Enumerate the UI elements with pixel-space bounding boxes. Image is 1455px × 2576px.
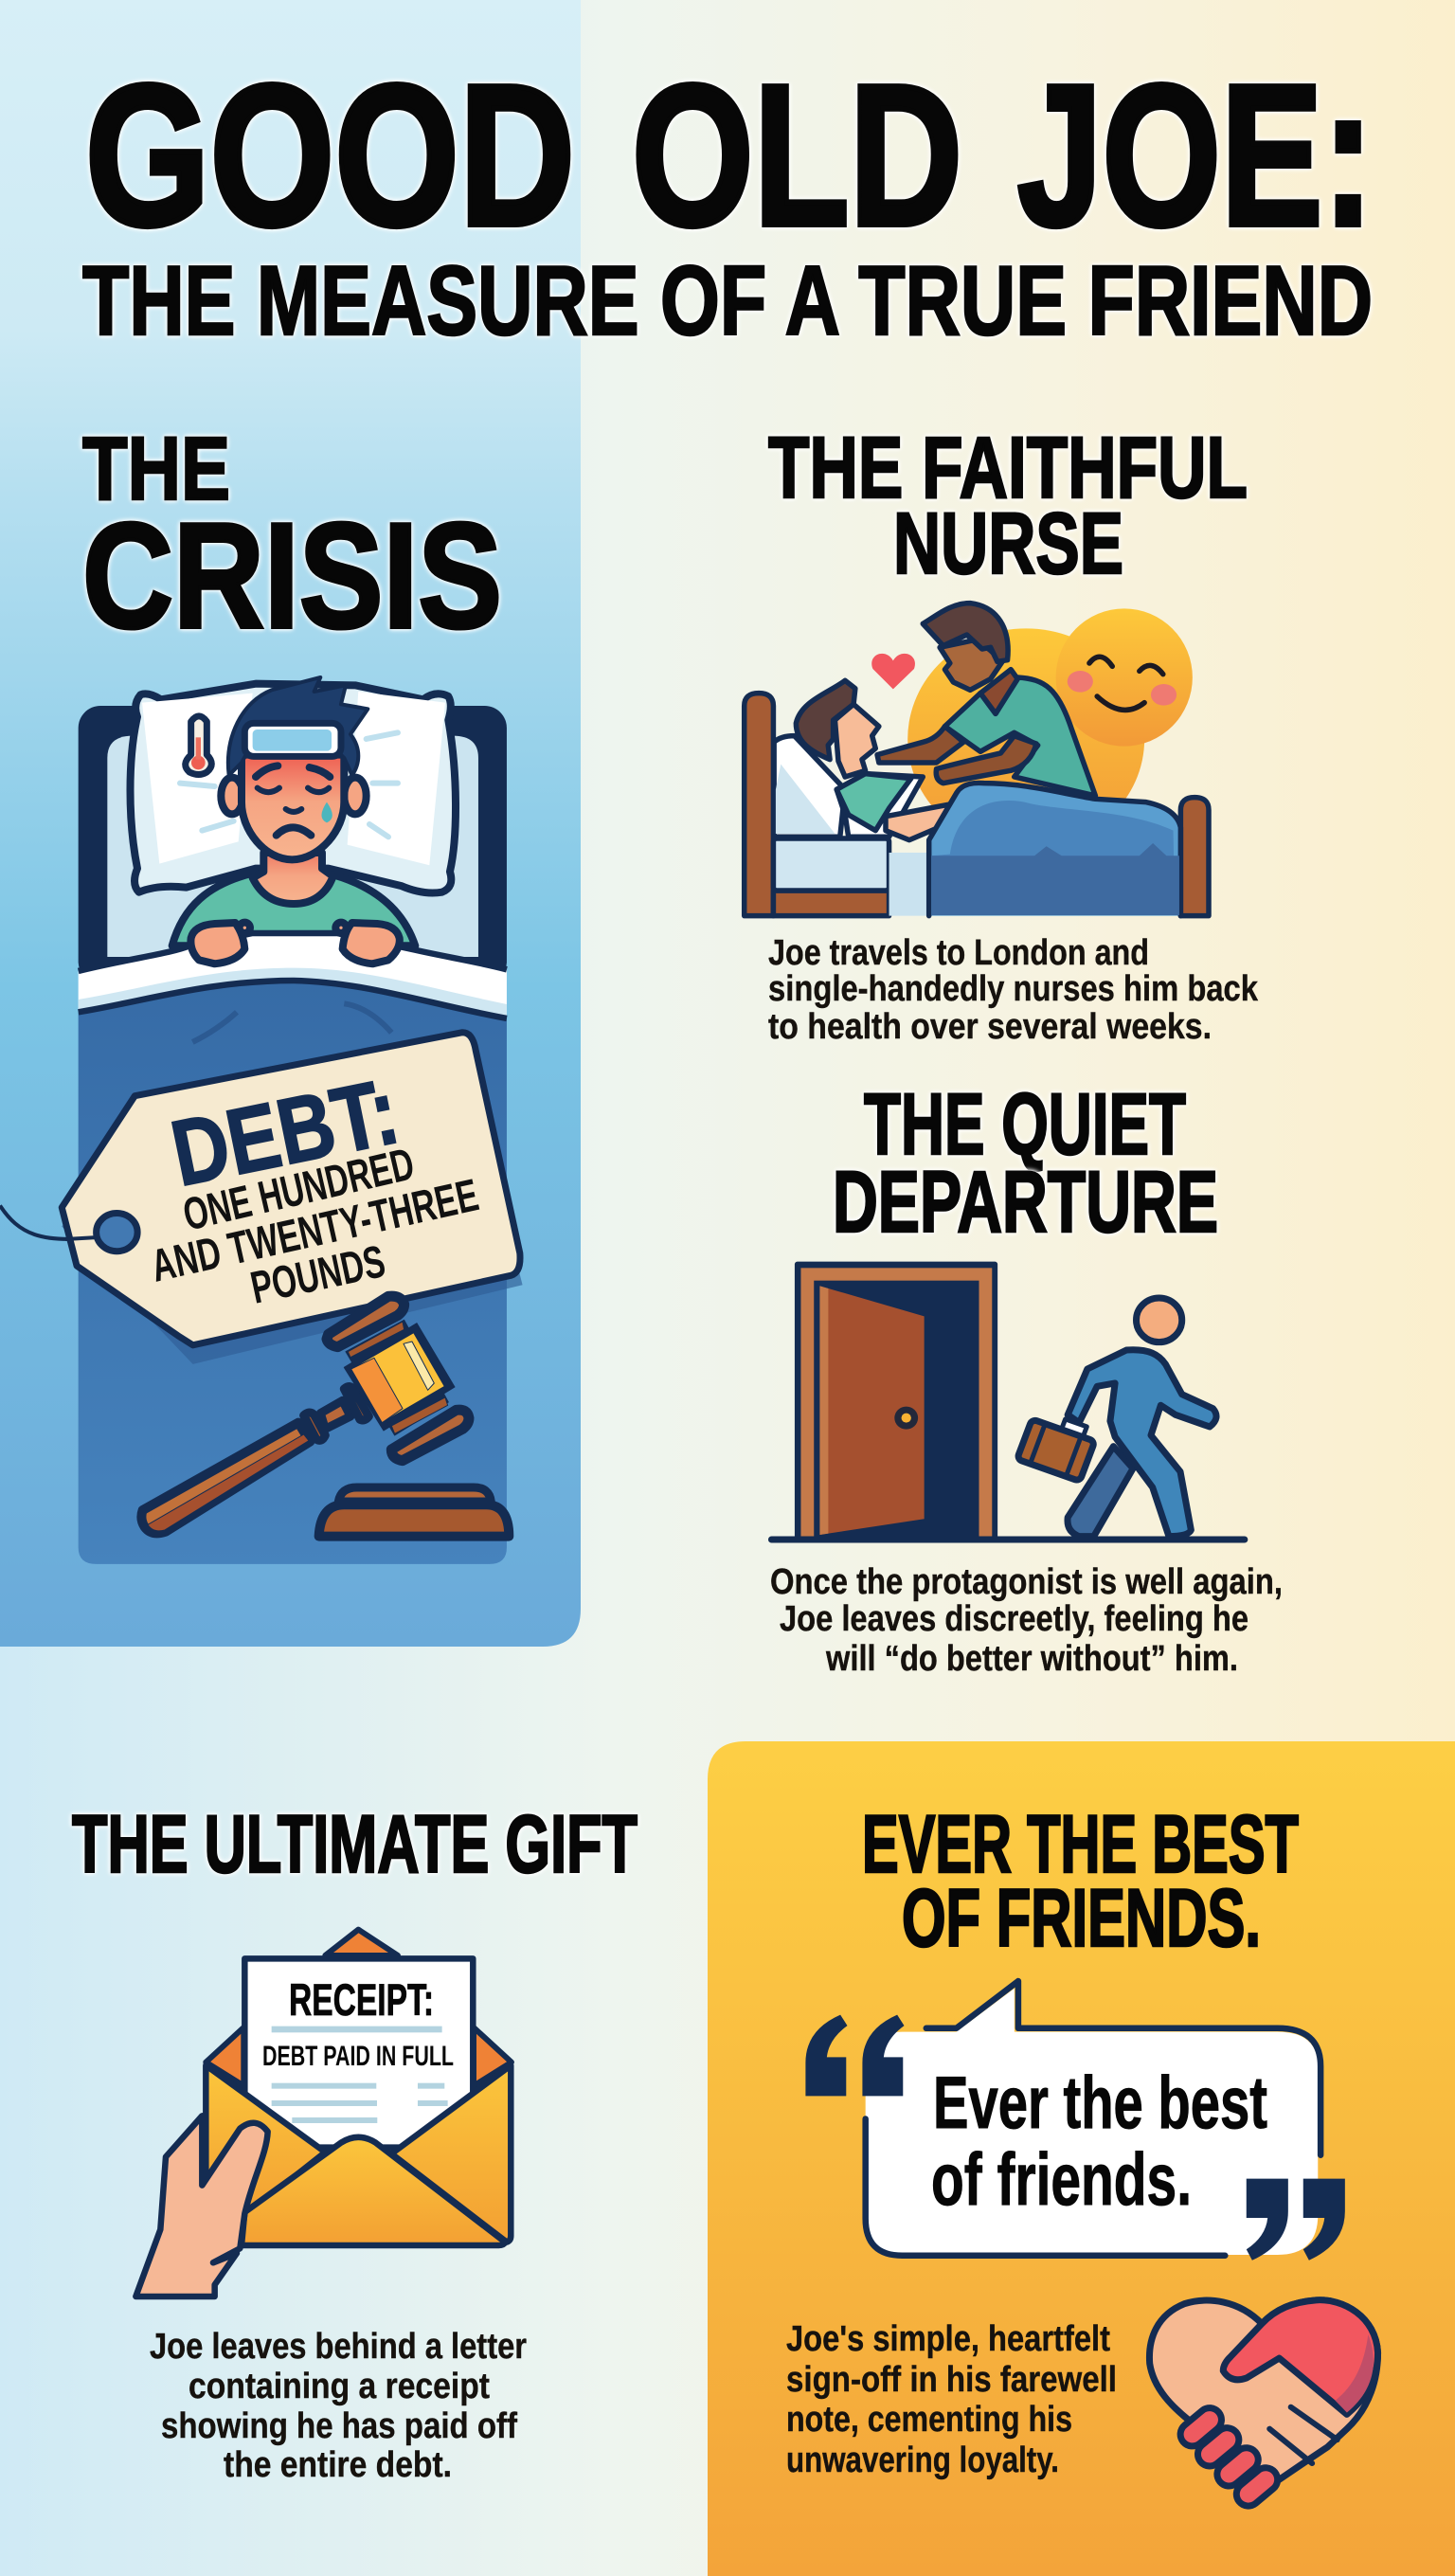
heading: the faithful nurse: THE FAITHFUL bbox=[768, 420, 1248, 516]
pillow bbox=[130, 684, 456, 892]
under sheet bbox=[107, 736, 478, 957]
closing quote marks bbox=[1247, 2179, 1345, 2261]
face bbox=[242, 755, 344, 859]
text: ultimate gift description: Joe leaves behind a letter bbox=[150, 2327, 527, 2367]
text: best of friends description bbox=[786, 2319, 1117, 2480]
receipt text: RECEIPT: bbox=[289, 1974, 434, 2025]
door frame bbox=[795, 1262, 997, 1540]
heart base bbox=[1149, 2300, 1378, 2501]
text: faithful nurse description: to health over several weeks. bbox=[768, 1007, 1212, 1047]
bed headboard bbox=[79, 706, 507, 983]
gold band bbox=[351, 1333, 444, 1423]
receipt text bbox=[262, 1974, 454, 2072]
receipt paper bbox=[244, 1958, 473, 2148]
nurse bbox=[877, 603, 1095, 796]
debt tag text: AND TWENTY-THREE bbox=[147, 1170, 483, 1292]
heading: the crisis: CRISIS bbox=[82, 493, 502, 659]
text: faithful nurse description: Joe travels to London and bbox=[768, 933, 1149, 973]
icon: man leaving through door bbox=[771, 1262, 1245, 1540]
tag shape bbox=[62, 1033, 520, 1345]
tag hole bbox=[97, 1214, 137, 1252]
red fingers bbox=[1193, 2420, 1266, 2495]
icon: handshake heart bbox=[1149, 2300, 1378, 2501]
icon: hand holding envelope with receipt bbox=[135, 1930, 512, 2297]
pillow bbox=[774, 736, 845, 837]
text: best of friends description: unwavering loyalty. bbox=[786, 2441, 1059, 2480]
heading: the quiet departure bbox=[833, 1076, 1218, 1251]
thin bands bbox=[348, 1322, 448, 1433]
text: best of friends description: Joe's simple, heartfelt bbox=[786, 2319, 1110, 2359]
receipt lines bbox=[272, 2027, 448, 2123]
upper cap bbox=[327, 1296, 404, 1347]
icon: nurse caring for patient in bed bbox=[745, 603, 1209, 916]
walking figure bbox=[1068, 1350, 1216, 1537]
heading: the ultimate gift: THE ULTIMATE GIFT bbox=[72, 1799, 638, 1890]
heading: ever the best of friends bbox=[862, 1799, 1299, 1964]
text: quiet departure description: Joe leaves discreetly, feeling he bbox=[780, 1599, 1248, 1639]
panel: the crisis background bbox=[0, 0, 581, 1647]
panel: ever the best of friends background bbox=[708, 1741, 1455, 2576]
text: ultimate gift description bbox=[150, 2327, 527, 2485]
open door bbox=[819, 1286, 925, 1535]
bubble outline bbox=[866, 1981, 1320, 2256]
head core bbox=[344, 1324, 455, 1431]
handle bbox=[141, 1423, 310, 1533]
blanket bbox=[79, 981, 507, 1564]
hand bbox=[135, 2116, 268, 2297]
heading: the quiet departure: DEPARTURE bbox=[833, 1154, 1218, 1251]
back leg bbox=[1068, 1447, 1133, 1537]
icon: sick man in bed with debt tag and gavel bbox=[0, 677, 523, 1564]
finger lines bbox=[1269, 2407, 1338, 2463]
smiley face bbox=[1056, 608, 1193, 747]
cold compress bbox=[244, 723, 341, 756]
text: faithful nurse description: single-handedly nurses him back bbox=[768, 969, 1259, 1009]
heading: the faithful nurse bbox=[768, 420, 1248, 592]
quote text: of friends. bbox=[931, 2137, 1192, 2221]
hair bbox=[228, 677, 368, 775]
debt tag text: ONE HUNDRED bbox=[179, 1139, 419, 1241]
shirt bbox=[172, 874, 415, 946]
title: GOOD bbox=[85, 43, 575, 267]
bubble fill bbox=[866, 1989, 1318, 2255]
text: ultimate gift description: showing he has paid off bbox=[161, 2406, 517, 2446]
quote text bbox=[931, 2061, 1267, 2221]
hands bbox=[190, 923, 400, 964]
text: best of friends description: sign-off in his farewell bbox=[786, 2360, 1117, 2400]
head bbox=[1137, 1298, 1182, 1342]
lower cap bbox=[391, 1410, 469, 1461]
gavel bbox=[141, 1296, 509, 1537]
quote text: Ever the best bbox=[933, 2061, 1267, 2144]
debt tag text bbox=[147, 1058, 483, 1314]
debt tag text: POUNDS bbox=[246, 1236, 389, 1314]
text: quiet departure description bbox=[770, 1562, 1283, 1679]
sun glow bbox=[907, 628, 1144, 850]
sound block bbox=[338, 1487, 491, 1502]
title bbox=[82, 43, 1374, 356]
neck and collars bbox=[320, 1400, 350, 1429]
heading: the quiet departure: THE QUIET bbox=[864, 1076, 1186, 1173]
blanket bbox=[929, 783, 1180, 916]
debt tag text: DEBT: bbox=[163, 1058, 406, 1206]
text: best of friends description: note, cementing his bbox=[786, 2400, 1072, 2440]
envelope back flap bbox=[325, 1930, 398, 1955]
door knob bbox=[894, 1407, 918, 1430]
red hand bbox=[1223, 2300, 1378, 2414]
heading: the crisis: THE bbox=[82, 419, 230, 519]
debt tag bbox=[0, 1033, 523, 1364]
text: ultimate gift description: the entire debt. bbox=[224, 2445, 452, 2485]
heart bbox=[871, 654, 915, 689]
patient bbox=[796, 680, 983, 840]
floor line bbox=[771, 1536, 1245, 1542]
bed and patient bbox=[79, 677, 507, 1564]
envelope body bbox=[206, 2065, 511, 2245]
eyes, brows, nose and mouth bbox=[256, 766, 330, 836]
opening quote marks bbox=[805, 2015, 905, 2096]
receipt text: DEBT PAID IN FULL bbox=[262, 2041, 454, 2072]
tear bbox=[321, 802, 332, 822]
text: faithful nurse description bbox=[768, 933, 1259, 1047]
neck bbox=[253, 853, 333, 904]
briefcase bbox=[1017, 1409, 1099, 1482]
blanket fold bbox=[79, 933, 507, 1018]
thermometer bbox=[186, 716, 211, 774]
text: ultimate gift description: containing a receipt bbox=[189, 2367, 490, 2406]
heading: the faithful nurse: NURSE bbox=[893, 495, 1123, 592]
bed posts and frame bbox=[745, 694, 1209, 916]
tag string bbox=[0, 1206, 98, 1239]
heading: ever the best of friends: OF FRIENDS. bbox=[902, 1873, 1261, 1964]
text: quiet departure description: will “do better without” him. bbox=[825, 1639, 1238, 1679]
heading: the crisis bbox=[82, 419, 502, 659]
title: OLD bbox=[632, 43, 962, 267]
callout: quote speech bubble bbox=[805, 1981, 1345, 2261]
text: quiet departure description: Once the protagonist is well again, bbox=[770, 1562, 1283, 1602]
ears bbox=[221, 778, 243, 814]
